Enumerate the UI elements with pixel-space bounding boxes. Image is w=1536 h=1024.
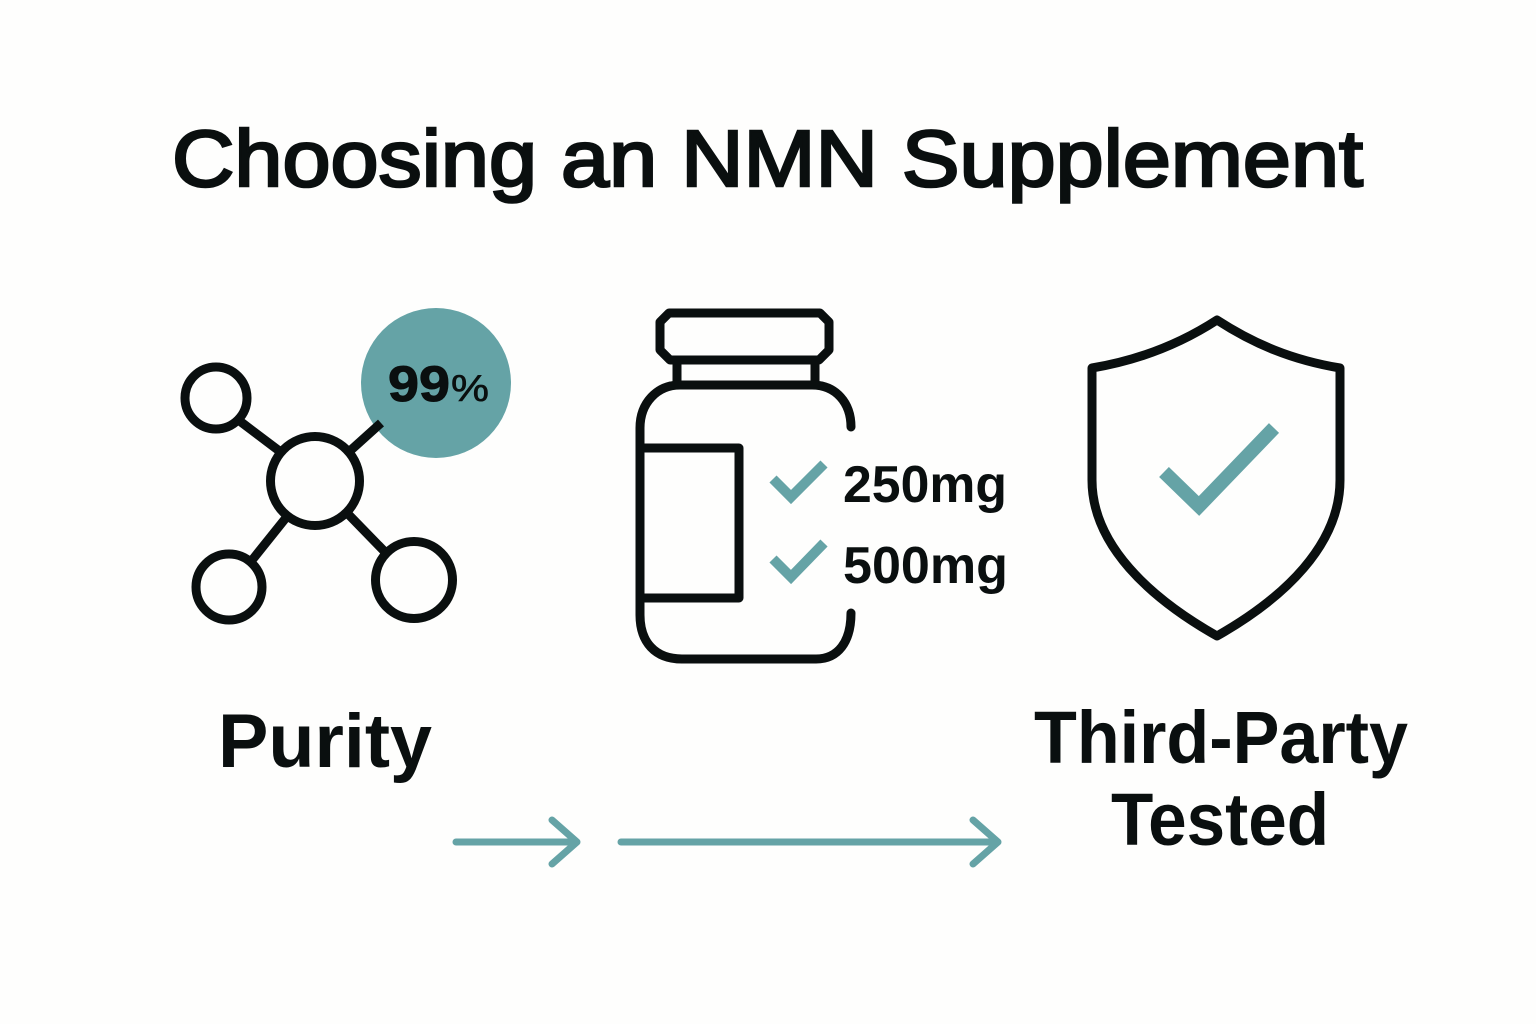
bottle body [640,385,851,659]
label: 500mg: 500mg [843,537,1008,595]
label: 250mg: 250mg [843,456,1007,514]
icon: shield with check [1092,320,1340,636]
badge: 99% purity: % [451,368,489,409]
title: Choosing an NMN Supplement [172,114,1363,203]
icon: molecule with purity badge [185,308,511,620]
shield outline [1092,320,1340,636]
icon: supplement bottle [640,313,851,659]
arrow: long [621,820,998,864]
check: 250mg [773,464,824,497]
molecule bonds and nodes [185,367,452,620]
check: 500mg [773,543,824,577]
heading: Third-Party Tested: Third-Party [1034,696,1408,779]
shield check [1164,428,1274,506]
heading: Third-Party Tested: Tested [1111,778,1329,861]
badge: 99% purity: 99 [388,356,450,412]
heading: Purity: Purity [218,699,432,784]
heading: Third-Party Tested [1034,696,1408,861]
dosage options [773,456,1008,595]
badge: 99% purity [361,308,511,458]
bottle label [640,448,739,598]
bottle neck [677,360,815,385]
bottle cap [660,313,829,360]
arrow: short [456,820,577,864]
